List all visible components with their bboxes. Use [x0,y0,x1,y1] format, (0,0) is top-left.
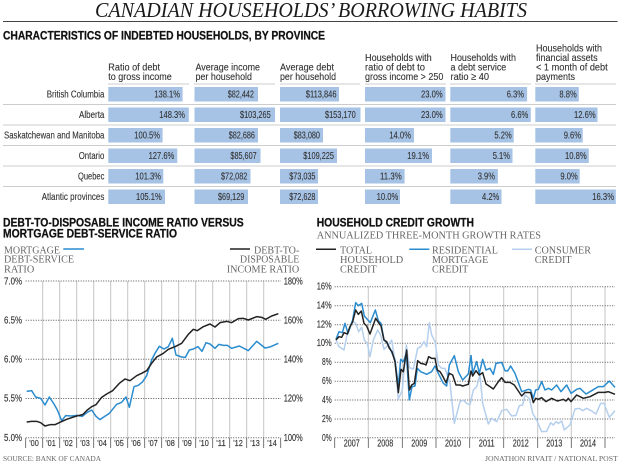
row: British Columbia: $113,846 [306,88,337,100]
legend: mortgage debt-service ratio [4,245,84,275]
row: Quebec: 101.3% [135,170,161,182]
legend: debt-to-disposable income ratio [227,245,300,275]
source note: SOURCE: BANK OF CANADA [3,454,102,463]
x axis year labels: '09 [182,438,192,448]
x axis year labels: '03 [80,438,90,448]
row: Quebec: $72,082 [221,170,247,182]
column headers: gross income > 250 [365,71,443,83]
row: British Columbia: $82,442 [228,88,254,100]
row: Ontario: 5.1% [493,150,510,162]
row: Ontario: $85,607 [230,150,257,162]
row: Saskatchewan and Manitoba: 14.0% [389,130,411,142]
row: Saskatchewan and Manitoba: Saskatchewan and Manitoba [4,130,105,142]
row: Alberta: 148.3% [159,109,185,121]
x axis year labels [29,438,277,448]
line chart: household credit growth [317,282,615,450]
row: Ontario: 10.8% [565,150,587,162]
row: Saskatchewan and Manitoba: 5.2% [494,130,512,142]
legend: mortgage debt-service ratio: DEBT-SERVICE [4,255,74,266]
column headers: a debt service [450,62,506,74]
row: British Columbia: 8.8% [559,88,577,100]
x axis year labels: '07 [148,438,158,448]
row: Quebec: 11.3% [380,170,402,182]
x axis year labels: '05 [114,438,124,448]
x axis year labels [344,438,596,450]
line: total household credit [336,310,615,403]
line: mortgage debt-service ratio [27,338,278,421]
x axis year labels: 2012 [513,438,529,450]
x axis year labels: 2009 [411,438,428,450]
row: British Columbia: 23.0% [421,88,443,100]
heading: characteristics table: CHARACTERISTICS OF INDEBTED HOUSEHOLDS, BY PROVINCE [3,31,325,43]
row: Atlantic provinces: $72,628 [289,191,316,203]
x axis year labels: '08 [165,438,175,448]
row: Alberta: 23.0% [421,109,443,121]
right axis labels: 140% [284,354,303,366]
row: Alberta: Alberta [79,109,105,121]
right axis labels: 180% [284,276,303,288]
row: Saskatchewan and Manitoba: 100.5% [134,130,160,142]
x axis year labels: '10 [199,438,209,448]
column headers: payments [536,71,575,83]
column headers: financial assets [536,52,598,64]
heading: household credit growth: HOUSEHOLD CREDIT GROWTH [317,218,474,230]
x axis year labels: 2014 [580,438,596,450]
x axis year labels: 2007 [344,438,360,450]
legend: debt-to-disposable income ratio: DEBT-TO- [254,245,300,256]
y axis labels: 0% [322,433,332,444]
x axis year labels: '13 [250,438,260,448]
heading: debt ratio chart: MORTGAGE DEBT-SERVICE RATIO [3,229,177,241]
row: Ontario [79,148,589,163]
panel: province table [3,43,616,204]
legend: mortgage debt-service ratio: MORTGAGE [4,245,60,256]
row: Saskatchewan and Manitoba: 9.6% [564,130,581,142]
row: Quebec: 3.9% [478,170,495,182]
legend: consumer credit: CONSUMER [535,246,591,257]
column headers: per household [196,71,252,83]
line: consumer credit [336,322,615,432]
row: Saskatchewan and Manitoba: $83,080 [294,130,320,142]
x axis year labels: '12 [233,438,243,448]
left axis labels: 6.5% [4,316,22,326]
row: British Columbia: 138.1% [154,88,180,100]
x axis year labels: '11 [216,438,226,448]
row: Ontario: $109,225 [303,150,334,162]
left axis labels [4,276,22,444]
row: Alberta: 12.6% [574,109,596,121]
column headers: Households with [450,52,516,64]
x axis year labels: '01 [46,438,56,448]
column headers: to gross income [108,71,172,83]
left axis labels: 7.0% [4,276,22,288]
x axis year labels: '04 [97,438,107,448]
column headers: ratio of debt to [365,62,425,74]
column headers [108,43,608,83]
legend: consumer credit: CREDIT [535,255,572,266]
y axis labels: 14% [317,300,332,312]
column headers: Average debt [280,62,334,74]
row: Ontario: 127.6% [149,150,174,162]
row: Quebec: $73,035 [289,170,316,182]
legend: debt-to-disposable income ratio: INCOME RATIO [227,264,300,275]
legend: debt-to-disposable income ratio: DISPOSABLE [240,255,299,266]
heading: debt ratio chart: DEBT-TO-DISPOSABLE INCOME RATIO VERSUS [3,218,244,230]
y axis labels: 4% [322,395,332,406]
x axis year labels: 2010 [445,438,461,450]
column headers: ratio ≥ 40 [450,71,489,83]
y axis labels: 6% [322,376,332,387]
legend: mortgage debt-service ratio: RATIO [4,264,35,275]
x axis year labels: 2011 [479,438,495,450]
legend: residential mortgage credit: RESIDENTIAL [432,246,498,257]
row: British Columbia [47,87,579,102]
row: Alberta: $153,170 [325,109,356,121]
legend: residential mortgage credit: MORTGAGE [432,255,488,266]
row: Alberta: $103,265 [240,109,271,121]
right axis labels: 160% [284,316,303,326]
y axis labels: 8% [322,357,332,368]
column headers: Average income [196,62,260,74]
row: Atlantic provinces [42,190,616,204]
column headers: Ratio of debt [108,62,160,74]
right axis labels: 120% [284,394,303,404]
legend: residential mortgage credit [409,246,498,276]
row: Ontario: Ontario [79,150,105,162]
line chart: debt-to-income versus debt-service [4,276,303,448]
y axis labels: 2% [322,414,332,425]
column headers: < 1 month of debt [536,62,608,74]
row: Atlantic provinces: $69,129 [218,191,244,203]
y axis labels: 12% [317,320,332,330]
row: Quebec [78,169,580,184]
left axis labels: 6.0% [4,354,22,366]
left axis labels: 5.0% [4,433,22,444]
subtitle: ANNUALIZED THREE-MONTH GROWTH RATES [317,230,541,241]
row: Saskatchewan and Manitoba: $82,686 [229,130,255,142]
column headers: per household [280,71,336,83]
row: Alberta [79,108,598,122]
credit note: JONATHON RIVAIT / NATIONAL POST [485,454,618,463]
line: residential mortgage credit [336,303,615,400]
row: Quebec: Quebec [78,170,104,182]
row: Quebec: 9.0% [560,170,578,182]
row: Ontario: 19.1% [407,150,429,162]
legend: total household credit [316,246,404,276]
row: Atlantic provinces: 105.1% [136,191,162,203]
x axis year labels: 2013 [546,438,563,450]
legend: total household credit: TOTAL [340,246,372,257]
x axis year labels: '06 [131,438,141,448]
x axis year labels: 2008 [377,438,394,450]
y axis labels [317,282,332,444]
heading: debt ratio chart [3,218,244,241]
column headers: Households with [536,43,602,55]
row: British Columbia: British Columbia [47,88,105,100]
row: Atlantic provinces: 4.2% [482,191,499,203]
column headers: Households with [365,52,432,64]
legend: residential mortgage credit: CREDIT [432,265,469,276]
legend: total household credit: CREDIT [340,265,377,276]
x axis year labels: '00 [29,438,39,448]
y axis labels: 10% [317,338,332,349]
row: British Columbia: 6.3% [507,88,524,100]
legend: consumer credit [512,246,591,266]
y axis labels: 16% [317,282,332,292]
x axis year labels: '02 [63,438,73,448]
right axis labels: 100% [284,433,303,444]
row: Atlantic provinces: Atlantic provinces [42,191,104,203]
left axis labels: 5.5% [4,394,22,404]
row: Saskatchewan and Manitoba [4,128,583,142]
x axis year labels: '14 [267,438,277,448]
legend: total household credit: HOUSEHOLD [340,255,404,266]
line: debt-to-disposable income ratio [27,314,278,426]
right axis labels [284,276,303,444]
row: Atlantic provinces: 10.0% [377,191,398,203]
row: Alberta: 6.6% [511,109,528,121]
